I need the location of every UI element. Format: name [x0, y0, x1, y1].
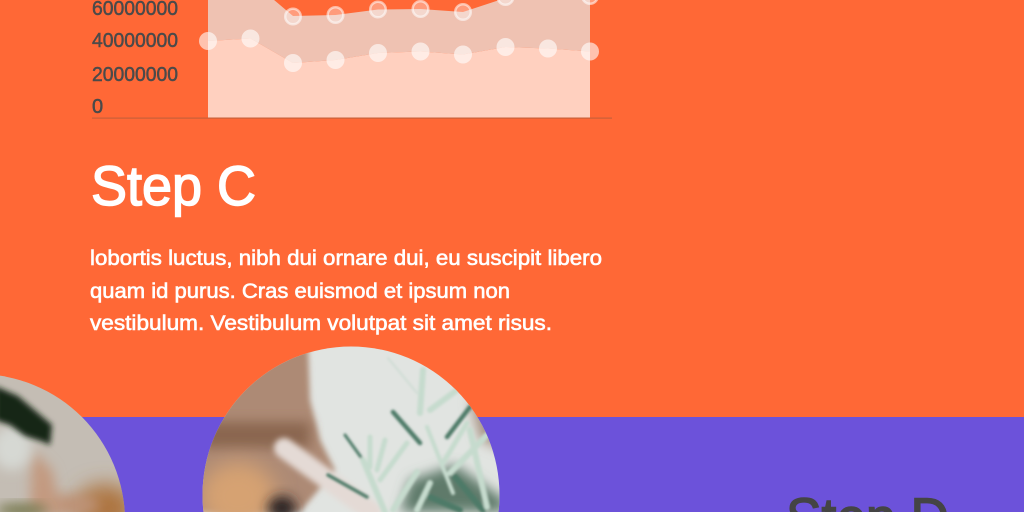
blurred foliage shadows	[400, 465, 505, 512]
lower series markers	[199, 30, 599, 72]
chart baseline	[92, 118, 612, 119]
y axis labels	[92, 0, 178, 118]
body text	[90, 247, 602, 335]
body text: quam id purus. Cras euismod et ipsum non	[90, 280, 510, 303]
purple background panel	[0, 417, 1024, 512]
y axis labels: 40000000	[92, 30, 178, 52]
y axis labels: 20000000	[92, 64, 178, 86]
upper series markers	[285, 0, 598, 24]
photo: cropped plant, left circle	[0, 376, 125, 512]
lower area series	[208, 38, 590, 118]
blurred orange cup	[200, 462, 276, 512]
heading: Step C: Step C	[91, 154, 256, 217]
blurred brown wall	[195, 344, 335, 512]
y axis labels: 0	[92, 96, 103, 118]
area chart	[92, 0, 612, 119]
upper area series	[208, 0, 590, 63]
blurred pale streak	[284, 448, 372, 512]
body text: vestibulum. Vestibulum volutpat sit amet risus.	[90, 312, 552, 335]
body text: lobortis luctus, nibh dui ornare dui, eu suscipit libero	[90, 247, 602, 270]
photo: rosemary plant, right circle	[195, 344, 505, 512]
rosemary sprigs	[328, 358, 487, 512]
